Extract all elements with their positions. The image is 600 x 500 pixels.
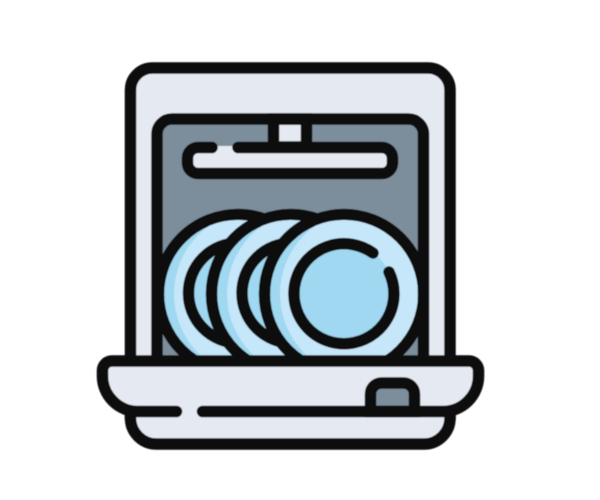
rack support post (274, 119, 306, 147)
interior cavity (157, 119, 424, 364)
middle plate (205, 208, 318, 356)
dishwasher body (130, 68, 450, 420)
plates (162, 208, 419, 356)
cavity outline (157, 119, 424, 364)
open door (102, 361, 478, 412)
back plate (162, 208, 265, 356)
icon: dishwasher (96, 61, 486, 451)
base below door (130, 411, 450, 444)
front plate (258, 208, 419, 356)
door handle (370, 383, 414, 412)
upper rack bar (188, 146, 392, 174)
